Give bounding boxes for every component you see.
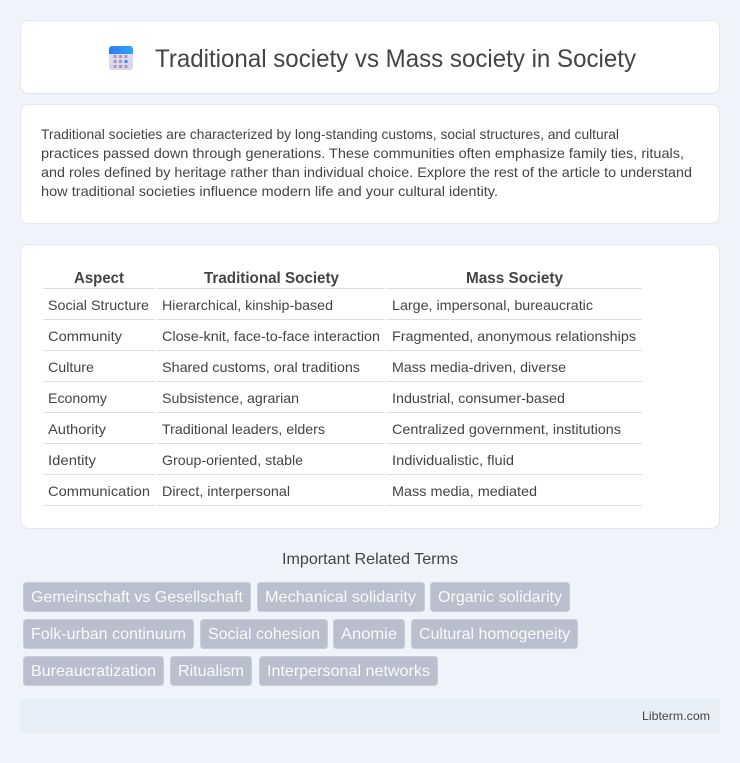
tag: Interpersonal networks: Interpersonal networks <box>267 663 430 680</box>
row: authority: Traditional leaders, elders <box>162 421 325 437</box>
row: authority: Centralized government, institutions <box>392 421 621 437</box>
tag: Folk-urban continuum <box>24 620 194 648</box>
tag: Folk-urban continuum: Folk-urban continuum <box>31 626 186 643</box>
row: identity: Identity <box>48 452 96 468</box>
table header: Traditional Society <box>204 270 339 287</box>
table header <box>74 270 563 287</box>
panel: intro <box>20 104 720 224</box>
row: economy <box>48 390 565 406</box>
table header: Aspect <box>74 270 125 287</box>
table rules <box>43 288 642 506</box>
row: social structure <box>48 297 593 313</box>
related term tags <box>24 582 578 686</box>
tag: Bureaucratization: Bureaucratization <box>31 663 156 680</box>
tag: Anomie <box>334 620 404 648</box>
row: economy: Subsistence, agrarian <box>162 390 299 406</box>
row: communication: Direct, interpersonal <box>162 483 290 499</box>
tag: Bureaucratization <box>24 656 164 686</box>
row: community: Fragmented, anonymous relationships <box>392 328 636 344</box>
tag: Interpersonal networks <box>260 656 438 686</box>
table header: Mass Society <box>466 270 563 287</box>
row: communication: Communication <box>48 483 150 499</box>
tag: Gemeinschaft vs Gesellschaft: Gemeinschaft vs Gesellschaft <box>31 589 244 606</box>
intro paragraph: practices passed down through generations. These communities often emphasize family ties, rituals, <box>41 145 684 161</box>
row: culture: Shared customs, oral traditions <box>162 359 360 375</box>
tag: Anomie: Anomie <box>341 626 397 643</box>
row: identity: Individualistic, fluid <box>392 452 514 468</box>
row: authority: Authority <box>48 421 106 437</box>
tag: Gemeinschaft vs Gesellschaft <box>24 582 250 612</box>
panel: comparison table <box>20 244 720 528</box>
footer brand: Libterm.com <box>642 709 710 723</box>
intro paragraph <box>41 126 692 199</box>
row: community: Community <box>48 328 122 344</box>
tag: Cultural homogeneity <box>412 620 578 648</box>
row: economy: Industrial, consumer-based <box>392 390 565 406</box>
row: economy: Economy <box>48 390 107 406</box>
row: identity: Group-oriented, stable <box>162 452 303 468</box>
tag: Ritualism <box>170 656 252 686</box>
tag: Mechanical solidarity <box>258 582 424 612</box>
row: social structure: Large, impersonal, bureaucratic <box>392 297 593 313</box>
title: Traditional society vs Mass society in Society <box>155 45 636 73</box>
row: social structure: Hierarchical, kinship-based <box>162 297 333 313</box>
tag: Organic solidarity: Organic solidarity <box>438 589 562 606</box>
row: social structure: Social Structure <box>48 297 149 313</box>
footer <box>20 699 720 733</box>
tag: Mechanical solidarity: Mechanical solidarity <box>265 589 416 606</box>
row: culture: Culture <box>48 359 94 375</box>
icon: calendar <box>109 46 133 70</box>
intro paragraph: and roles defined by heritage rather than individual choice. Explore the rest of the article to understand <box>41 164 692 180</box>
tag: Organic solidarity <box>430 582 570 612</box>
tag: Ritualism: Ritualism <box>178 663 244 680</box>
tag: Social cohesion <box>200 620 328 648</box>
row: authority <box>48 421 621 437</box>
row: identity <box>48 452 514 468</box>
panel: header <box>20 20 720 94</box>
row: community: Close-knit, face-to-face interaction <box>162 328 380 344</box>
row: communication <box>48 483 537 499</box>
row: community <box>48 328 636 344</box>
intro paragraph: Traditional societies are characterized by long-standing customs, social structures, and cultural <box>41 126 619 142</box>
tag: Social cohesion: Social cohesion <box>208 626 320 643</box>
row: culture <box>48 359 566 375</box>
tag: Cultural homogeneity: Cultural homogeneity <box>419 626 570 643</box>
row: culture: Mass media-driven, diverse <box>392 359 566 375</box>
heading: important related terms: Important Related Terms <box>282 551 458 568</box>
row: communication: Mass media, mediated <box>392 483 537 499</box>
intro paragraph: how traditional societies influence modern life and your cultural identity. <box>41 183 498 199</box>
